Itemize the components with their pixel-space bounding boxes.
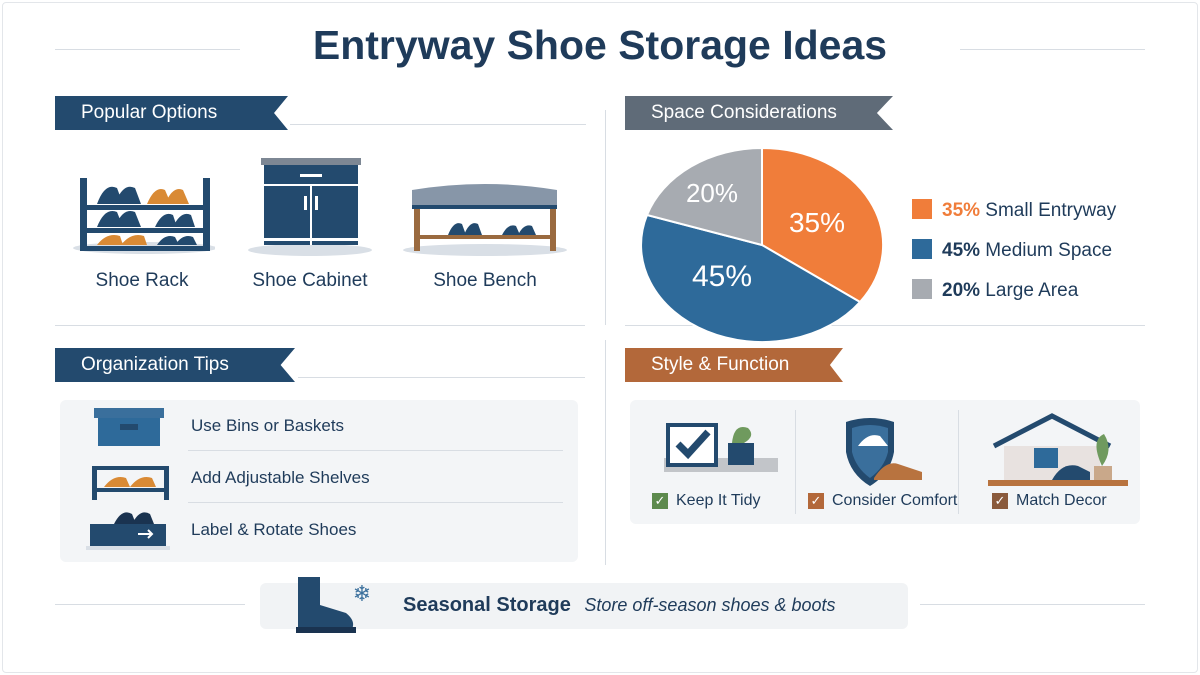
panel: style [630,400,1140,524]
heading: Popular Options: Popular Options [81,102,217,123]
item: match decor: Match Decor [1016,492,1107,509]
icon: label box [86,512,170,550]
title: Entryway Shoe Storage Ideas [313,22,887,68]
tip 3: Label & Rotate Shoes [191,520,356,539]
legend: 20% Large Area [942,280,1078,301]
item: match decor: ✓ [995,493,1005,508]
icon: boot [296,577,371,633]
icon: shelves [92,466,169,500]
legend: 35% Small Entryway [942,200,1116,221]
label: shoe bench: Shoe Bench [433,270,537,291]
icon: shoe rack [73,178,215,254]
pie chart: 20% [686,178,738,208]
heading: Popular Options [55,96,288,130]
banner text: Seasonal Storage Store off-season shoes & boots [403,594,836,616]
item: consider comfort: Consider Comfort [832,492,957,509]
icon: bin [94,408,164,446]
pie chart: 35% [789,207,845,238]
item: keep it tidy: ✓ [655,493,665,508]
pie chart: 45% [692,260,752,293]
tip 1: Use Bins or Baskets [191,416,344,435]
icon: boot: ❄ [353,581,371,606]
banner: seasonal storage [260,583,908,629]
heading: Style & Function [625,348,843,382]
icon: house [988,413,1128,486]
heading: Style & Function: Style & Function [651,354,789,375]
icon: shoe bench [403,184,567,256]
heading: Space Considerations: Space Considerations [651,102,837,123]
item: keep it tidy: Keep It Tidy [676,492,760,509]
icon: comfort shield [846,418,922,486]
label: shoe cabinet: Shoe Cabinet [252,270,368,291]
label: shoe rack: Shoe Rack [96,270,188,291]
heading: Organization Tips [55,348,295,382]
legend: 45% Medium Space [942,240,1112,261]
icon: tidy [664,423,778,472]
legend [912,199,1116,301]
icon: shoe cabinet [248,158,372,256]
panel: tips [60,400,578,562]
heading: Space Considerations [625,96,893,130]
tip 2: Add Adjustable Shelves [191,468,370,487]
item: consider comfort: ✓ [811,493,821,508]
heading: Organization Tips: Organization Tips [81,354,229,375]
